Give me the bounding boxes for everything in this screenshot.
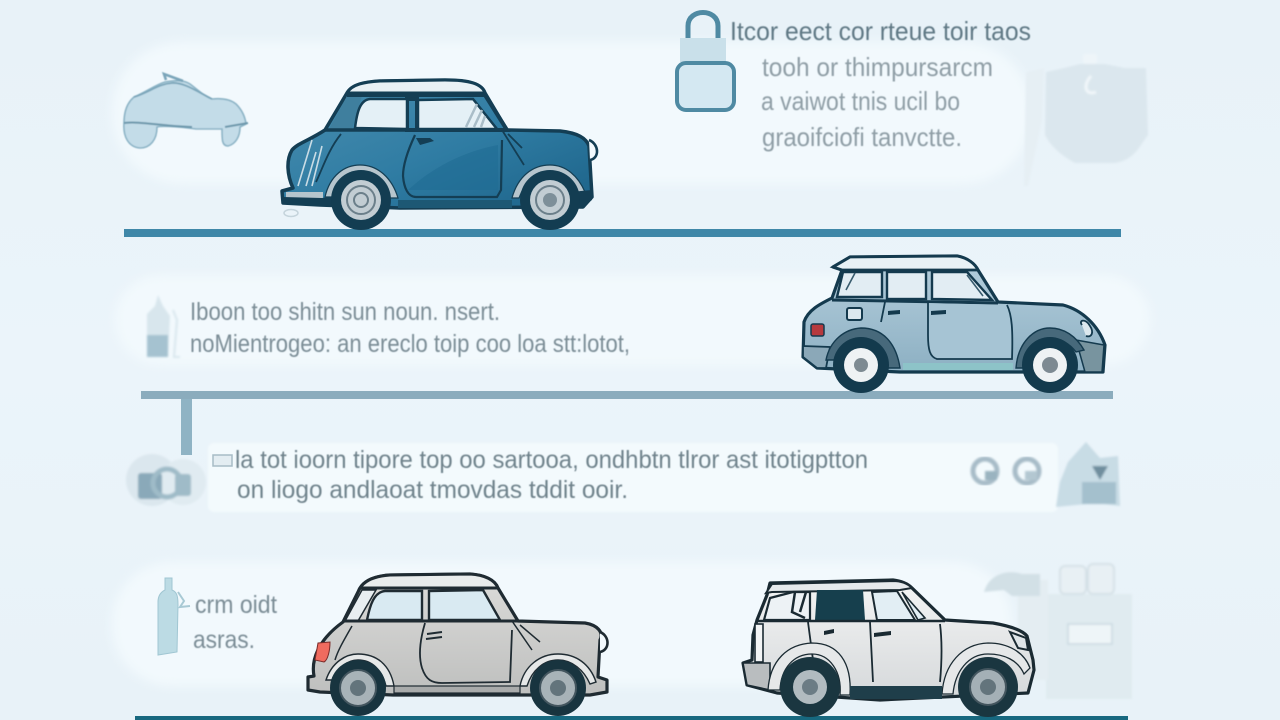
car 4 belt line [757,620,945,622]
car 1 sill [398,200,512,208]
text line: graoifciofi tanvctte. [762,122,962,152]
text line: tooh or thimpursarcm [762,52,993,82]
car 1 body highlight [408,145,498,190]
car 4 rear fender flare [768,643,850,695]
car 2 rear wheel [833,337,889,393]
panel: band 4 [112,562,1012,686]
car 3 belt line [343,620,518,622]
car 2 rear fender arch [826,328,900,368]
car 3 sill [394,686,520,693]
car 2 window middle [887,272,926,299]
car 1 lower shadow [283,196,340,206]
car 1 rear window [355,99,407,129]
car 3 roof [360,574,498,588]
car 2 window front [932,272,992,300]
panel: band 3 [208,443,1058,512]
car 2 door front [928,303,1012,359]
car 1 rear bumper [286,192,323,198]
icon: padlock [677,12,734,110]
text line: crm oidt [195,591,277,619]
car 3 front wheel [530,660,586,716]
car 2 front bumper [1076,340,1104,372]
car 4 front wheel [958,657,1018,717]
car 4 door handles [824,629,891,637]
car 3 door [420,623,512,683]
text: top block [730,16,1031,152]
car 2 tail lamp [811,324,824,336]
car 3 rear wheel [330,660,386,716]
car 3: silver mini [308,574,608,716]
car 1 door handle [416,138,434,145]
car 4 door lines [808,622,942,682]
car 4 dark window [815,590,865,620]
text line: la tot ioorn tipore top oo sartooa, ondhbtn tlror ast itotigptton [235,446,868,474]
car 4 front fender flare [942,643,1030,694]
car 2: steel blue hatch [803,256,1105,393]
text line: noMientrogeo: an ereclo toip coo loa stt:lotot, [190,330,630,358]
car 2 roof [833,256,978,270]
car 3 door handle [426,632,442,639]
icon: dash mark before text [213,455,232,466]
car 2 front fender arch [1016,328,1084,368]
icon: twin gears band 3 [973,459,1039,483]
car 1 rear fender arch [325,165,398,198]
car 1 front bumper loop [589,140,597,160]
car 4 front window [872,591,915,620]
car 3 front bumper loop [600,632,608,652]
car 2 body [803,256,1105,372]
car 2 headlamp [1081,321,1092,336]
car 3 rear fender arch [326,654,394,686]
text line: Iboon too shitn sun noun. nsert. [190,298,500,326]
car 4 sill [850,686,942,699]
car 1 front window [418,99,497,129]
ground line 2 [141,391,1113,399]
car 1 rear pillar glass [329,96,362,129]
text: band 3 block [235,446,868,504]
car 1 roof [347,80,485,93]
car 2 window rear [837,272,882,297]
car 1 front panel line [502,130,524,165]
icon: cloud car silhouette [124,74,248,148]
icon: faded backpack top right [1024,54,1148,186]
car 1 window reflection [466,104,485,127]
car 3 body [308,574,607,695]
car 1 body [282,80,592,208]
connector stem [181,399,192,455]
car 1 rear glint [298,140,322,186]
car 1 front wheel [520,170,580,230]
car 1: blue mini [282,80,597,230]
icon: bottle band 2 [147,295,180,357]
padlock body [677,63,734,110]
car 1 front bumper shadow [565,190,592,208]
car 1 rear wheel [331,170,391,230]
car 4: white SUV [743,580,1034,717]
car 4 rear wheel [780,657,840,717]
car 2 fuel cap [847,308,862,320]
car 2 front wheel [1022,337,1078,393]
icon: parts cluster band 3 [126,454,206,506]
car 2 belt line [832,300,998,303]
car 4 vent window [902,592,925,620]
car 3 rear window [367,591,422,620]
car 2 window glints [846,273,983,296]
car 1 belt line [325,128,507,132]
panel: band 1 [112,42,1032,184]
car 4 rear pillar slats [792,592,806,618]
car 1 pillar frame [347,95,507,130]
ground line 1 [124,229,1121,237]
car 4 body [743,580,1034,700]
car 1 door [403,135,502,197]
car 1 front fender arch [512,165,585,198]
car 3 rear pillar [345,590,376,621]
car 2 sill [903,363,1013,370]
text: band 4 block [193,591,277,654]
car 3 tail lamp [315,642,330,662]
car 1 rear panel line [316,134,341,182]
car 1 exhaust puff [284,210,298,216]
text line: on liogo andlaoat tmovdas tddit ooir. [237,476,628,504]
car 4 headlamp [1010,632,1028,650]
text line: a vaiwot tnis ucil bo [761,86,960,116]
car 2 door handles [888,310,946,315]
car 4 roof rail [766,581,912,593]
text line: Itcor eect cor rteue toir taos [730,16,1031,46]
ground line 3 [135,716,1128,720]
car 4 rear light [755,624,763,662]
car 4 rear bumper [743,663,770,690]
car 3 front window [429,590,500,620]
panel: band 2 [115,275,1150,365]
padlock shackle [688,12,718,38]
padlock faded upper block [680,38,726,62]
text: band 2 block [190,298,630,358]
car 3 front fender arch [520,654,596,686]
car 3 bonnet line [512,621,540,650]
car 2 door rear line [881,302,885,322]
car 3 rear panel line [335,626,352,660]
icon: spray bottle band 4 [158,578,190,655]
car 2 rear lower shadow [803,346,830,368]
text line: asras. [193,626,255,654]
icon: tool kit band 3 [1056,442,1120,507]
car 4 rear window [764,592,810,620]
icon: faded machine bottom right [984,564,1132,699]
